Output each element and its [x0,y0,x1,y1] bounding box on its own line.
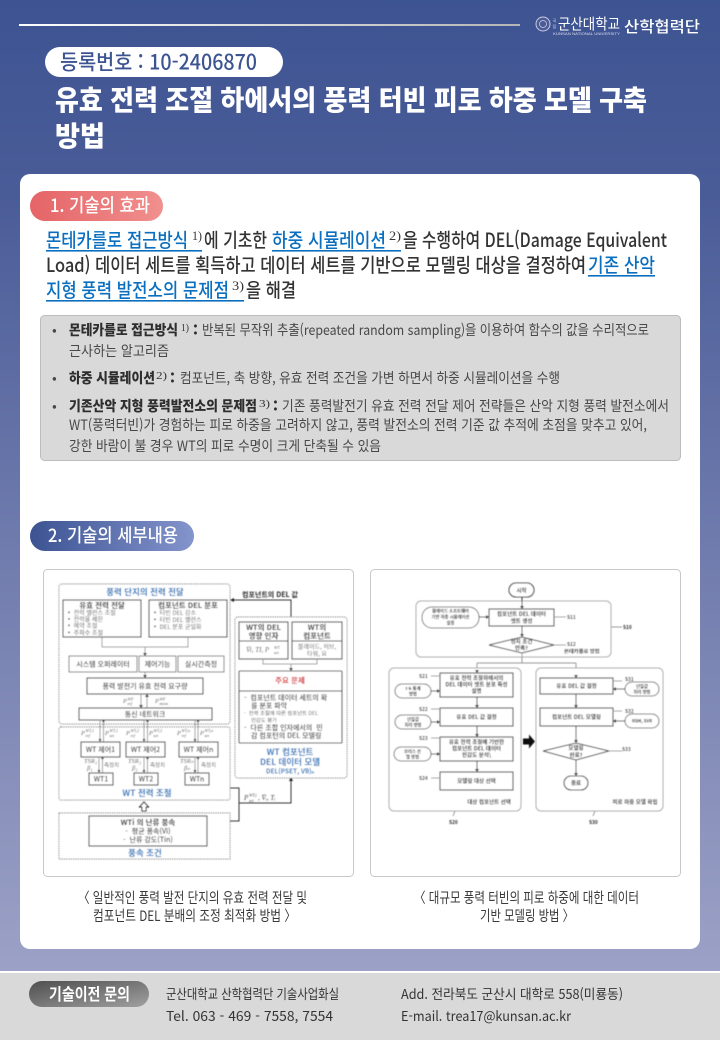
group: turbine power control: 측정치 [201,761,216,769]
group: S10 Monte Carlo [416,597,632,657]
group: turbine power control: WTn [190,774,204,784]
definition: Monte Carlo [52,320,649,361]
university logo: KUNSAN NATIONAL UNIVERSITY [553,31,620,36]
definition: load simulation: 2) [156,370,167,382]
definition: Monte Carlo: 1) [181,322,189,334]
group: WT component DEL data model: WT 컴포넌트 [267,746,314,758]
group: wind farm power delivery: ▪ 전력 밸런스 조절 [66,608,116,617]
group: S10 Monte Carlo: 기반 하중 시뮬레이션 [432,614,470,620]
group: S20 target component selection: 민감도 분석\ [462,751,492,759]
university logo: 군산대학교 [558,13,620,34]
group: turbine power control: WT 전력 조절 [122,787,172,799]
group: WT component DEL data model: DEL 데이터 모델 [260,756,320,768]
group: wind farm power delivery: 풍력 단지의 전력 전달 [106,586,184,598]
group: WT component DEL data model: 컴포넌트 [303,630,331,642]
group: S30 fatigue load model: 컴포넌트 DEL 모델링 [552,713,601,721]
group: turbine power control: β₂ [131,765,138,772]
group: S20 target component selection: 처리 방법 [404,722,422,728]
connector arrows with labels: set [249,798,254,803]
group: wind farm power delivery: 시스템 오퍼레이터 [76,660,130,670]
group: turbine power control: WT 제어1 [86,745,115,755]
title: 유효 전력 조절 하에서의 풍력 터빈 피로 하중 모델 구축 [55,79,647,119]
icon: black arrow [523,734,535,748]
group: WT component DEL data model: - 다른 조합 인자에서의 민 [244,723,323,733]
text block: effect summary: 몬테카를로 접근방식 [46,224,188,253]
group: turbine power control: set [110,733,115,738]
group: wind farm power delivery: WF [160,696,166,702]
contact: organisation and phone [166,983,339,1025]
group: S30 fatigue load model [536,668,663,826]
caption: left figure: 컴포넌트 DEL 분배의 조정 최적화 방법 〉 [93,905,296,926]
definition: existing problems: 기존 풍력발전기 유효 전력 전달 제어 전략들은 산악 지형 풍력 발전소에서 [282,396,669,416]
group: turbine power control: TSR₁ [84,758,97,765]
group: wind speed condition: - 평균 풍속(V̄i) [125,826,171,836]
panel: footer [0,973,720,1040]
connector arrows with labels: , V̄ᵢ, Tᵢ [258,794,275,802]
group: S30 fatigue load model: 모델링 [568,744,584,752]
group: S30 fatigue load model: S31 [625,676,634,683]
start node [509,583,534,597]
group: S30 fatigue load model: 완료? [570,751,583,759]
group: turbine power control: WT,2 [154,728,162,734]
text block: effect summary [46,224,667,303]
group: wind farm power delivery: P [154,698,159,705]
group: wind farm power delivery: 컴포넌트 DEL 분포 [158,600,218,611]
group: wind farm power delivery: ▪ 예약 조절 [66,621,97,630]
group: S30 fatigue load model: 처리 방법 [633,688,651,696]
text block: effect summary: 기존 산악 [588,249,655,278]
group: wind farm power delivery: ▪ 전력율 제한 [66,614,103,624]
group: S20 target component selection: S21 [419,673,428,680]
group: WT component DEL data model: 률 분포 파악 [251,701,288,711]
definition: existing problems: WT(풍력터빈)가 경험하는 피로 하중을 고려하지 않고, 풍력 발전소의 전력 기준 값 추적에 초점을 맞추고 있어, [69,415,647,435]
group: turbine power control: set [204,733,210,738]
group: wind farm power delivery: 풍력 발전기 유효 전력 요구량 [102,682,188,692]
group: S10 Monte Carlo: 만족? [515,644,528,652]
text block: effect summary: 3) [232,278,244,293]
definition: existing problems: 기존산악 지형 풍력발전소의 문제점 [69,396,257,416]
definition: Monte Carlo: 근사하는 알고리즘 [69,341,169,361]
group: WT component DEL data model: - 컴포넌트 데이터 세트의 확 [244,693,328,703]
text block: effect summary: 1) [192,228,202,243]
group: S20 target component selection: S23 [419,735,428,742]
group: WT component DEL data model: V̄i, TI, P [246,646,270,654]
group: wind farm power delivery: ▪ DEL 분포 균일화 [152,622,202,631]
definition: existing problems [52,396,669,456]
footer label pill: 기술이전 문의 [49,981,130,1005]
group: wind farm power delivery: 유효 전력 전달 [79,600,125,611]
contact: organisation and phone: Tel. 063 - 469 - 7558, 7554 [166,1005,334,1025]
panel: left figure frame [44,570,354,876]
group: S30 fatigue load model: S30 [589,819,598,826]
group: wind speed condition [59,813,230,859]
group: S10 Monte Carlo: S10 [623,624,632,631]
group: WT component DEL data model: 타워, 요 [307,649,327,658]
text block: effect summary: 을 해결 [246,274,296,303]
group: turbine power control: βₙ [183,765,190,772]
definition: Monte Carlo: : [193,320,198,340]
panel: main white card [20,174,700,949]
group: WT component DEL data model: WT의 DEL [246,622,282,633]
connector arrows with labels: P [243,794,249,802]
group: S20 target component selection: 유효 전력 조절하에서의 [450,674,503,682]
definition: load simulation [52,368,560,388]
text block: effect summary: 지형 풍력 발전소의 문제점 [46,274,229,303]
panel: definitions [40,316,680,460]
definition: Monte Carlo: • [52,320,57,340]
group: wind farm power delivery: ▪ 터빈 DEL 밸런스 [152,615,202,624]
group: S10 Monte Carlo: 컴포넌트 DEL 데이터 [497,610,546,618]
definition: existing problems: • [52,396,57,416]
group: S10 Monte Carlo: 몬테카를로 방법 [564,647,600,655]
group: turbine power control: 측정치 [104,761,119,769]
group: turbine power control [59,720,230,800]
group: turbine power control: WT,1 [86,728,94,734]
group: turbine power control: P [148,730,153,737]
caption: right figure [414,887,639,926]
group: S30 fatigue load model: RSM, SVR [632,718,652,724]
group: S20 target component selection: 모리스 선 [404,748,421,755]
icon: hollow up arrow [140,802,148,811]
chart: wind farm power delivery diagram [59,584,347,859]
group: wind farm power delivery: 실시간측정 [185,660,217,670]
contact: organisation and phone: 군산대학교 산학협력단 기술사업화실 [166,983,339,1003]
group: S20 target component selection: S22 [419,706,428,713]
group: WT component DEL data model [235,617,347,778]
heading: 2. technology details: 2. 기술의 세부내용 [48,522,178,548]
group: S20 target component selection: S20 [449,819,458,826]
group: WT component DEL data model: 감 컴포턴의 DEL 모델링 [251,731,321,741]
group: S10 Monte Carlo: 셋트 생성 [511,617,532,625]
university logo: 립 [552,23,556,29]
group: WT component DEL data model: - 전력 조절에 따른 컴포넌트 DEL [244,709,318,717]
group: S20 target component selection: S24 [419,775,428,782]
group: S20 target component selection: 단일값 [407,716,419,723]
group: wind farm power delivery: ▪ 터빈 DEL 감소 [152,608,197,617]
group: S20 target component selection [389,668,521,826]
text block: effect summary: 하중 시뮬레이션 [272,224,386,253]
text block: effect summary: 을 수행하여 DEL(Damage Equivalent [403,224,667,253]
group: wind farm power delivery: meas [160,701,168,706]
definition: existing problems: 3) [259,398,270,410]
group: turbine power control: WT2 [139,774,153,784]
definition: existing problems: 강한 바람이 불 경우 WT의 피로 수명이 크게 단축될 수 있음 [69,436,381,456]
group: turbine power control: β₁ [86,765,92,772]
definition: load simulation: • [52,368,57,388]
heading: 1. technology effect: 1. 기술의 효과 [50,192,150,218]
group: S10 Monte Carlo: 설정 [447,620,454,626]
group: wind farm power delivery: 제어기능 [145,660,171,670]
group: S10 Monte Carlo: S11 [567,614,576,621]
caption: right figure: 〈 대규모 풍력 터빈의 피로 하중에 대한 데이터 [414,887,639,908]
start node: 시작 [516,586,527,594]
title [55,79,647,155]
group: wind farm power delivery: ref [128,701,133,706]
group: WT component DEL data model: 주요 문제 [275,675,305,686]
caption: left figure [78,887,307,926]
definition: existing problems: : [273,396,278,416]
group: turbine power control: WT 제어n [184,745,213,755]
connector arrows with labels: 컴포넌트의 DEL 값 [242,590,299,600]
university logo [536,13,700,37]
definition: load simulation: : [170,368,175,388]
group: WT component DEL data model: 영향 인자 [249,630,278,642]
group: S20 target component selection: t-k 통계 [405,685,421,692]
group: turbine power control: WT,2 [130,728,139,734]
text block: effect summary: Load) 데이터 세트를 획득하고 데이터 세트를 기반으로 모델링 대상을 결정하여 [46,249,586,278]
registration number pill: 등록번호 : 10-2406870 [60,46,257,76]
caption: right figure: 기반 모델링 방법 〉 [480,905,574,926]
group: S30 fatigue load model: 단일값 [636,683,648,690]
flow connector [477,653,576,671]
group: turbine power control: WT1 [94,774,108,784]
group: S20 target component selection: 별 방법 [406,754,419,760]
group: S10 Monte Carlo: 블레이드 소프트웨어 [432,608,469,614]
group: wind farm power delivery [59,584,230,724]
group: S20 target component selection: DEL 데이터 셋트 분포 특성 [445,680,508,688]
group: WT component DEL data model: 블레이드, 허브, [298,642,336,651]
group: S30 fatigue load model: S33 [622,746,631,753]
group: wind farm power delivery: 통신 네트워크 [125,710,166,720]
group: wind farm power delivery: ▪ 주파수 조절 [66,628,103,637]
group: turbine power control: TSR₂ [128,758,142,765]
group: turbine power control: P [125,730,130,737]
group: turbine power control: P [176,730,181,737]
text block: effect summary: 에 기초한 [204,224,267,253]
group: turbine power control: P [199,730,204,737]
group: turbine power control: P [104,730,109,737]
definition: load simulation: 하중 시뮬레이션 [69,368,155,388]
group: turbine power control: P [80,730,85,737]
university logo: 산학협력단 [624,15,700,37]
group: S20 target component selection: 컴포넌트 DEL 데이터 [452,744,501,752]
definition: load simulation: 컴포넌트, 축 방향, 유효 전력 조건을 가변 하면서 하중 시뮬레이션을 수행 [180,368,560,388]
group: WT component DEL data model: 민감도 평가 [251,716,277,724]
group: wind farm power delivery: P [122,698,127,705]
connector arrows with labels: WT,i [249,792,258,798]
group: turbine power control: WT,n [204,728,213,734]
university logo: 국 [552,18,556,23]
group: S20 target component selection: 유효 DEL 값 결정 [456,713,497,721]
group: wind speed condition: WTi 의 난류 풍속 [121,817,175,828]
group: turbine power control: WT,1 [110,728,118,734]
panel: right figure frame [370,570,680,876]
group: S10 Monte Carlo: 정지 조건 [511,638,532,646]
group: turbine power control: WT,n [182,728,190,734]
group: S30 fatigue load model: 유효 DEL 값 결정 [556,682,597,690]
title: 방법 [55,115,105,155]
chart: modeling flowchart [389,583,663,826]
group: WT component DEL data model: set [274,650,279,655]
group: wind speed condition: 풍속 조건 [128,847,162,859]
group: S30 fatigue load model: 피로 하중 모델 확립 [612,798,658,806]
group: turbine power control: set [154,733,159,738]
group: wind farm power delivery: WF [128,696,134,702]
group: S20 target component selection: 대상 컴포넌트 선택 [467,798,511,806]
group: turbine power control: 측정치 [150,761,165,769]
caption: left figure: 〈 일반적인 풍력 발전 단지의 유효 전력 전달 및 [78,887,307,908]
group: turbine power control: ref [182,733,187,738]
contact: address and email [401,983,623,1025]
text block: effect summary: 2) [389,228,401,243]
connector arrows with labels [230,590,299,821]
group: S20 target component selection: 방법 [409,690,417,698]
group: S10 Monte Carlo: S12 [567,641,576,648]
group: turbine power control: ref [130,733,136,738]
group: turbine power control: WT 제어2 [131,745,160,755]
group: S30 fatigue load model: 종료 [571,779,581,787]
contact: address and email: Add. 전라북도 군산시 대학로 558(미룡동) [401,983,623,1003]
group: S20 target component selection: 모델링 대상 선택 [457,777,496,785]
group: turbine power control: TSRₙ [180,758,194,765]
group: turbine power control: ref [86,733,91,738]
header rule [19,24,520,26]
contact: address and email: E-mail. trea17@kunsan.ac.kr [401,1005,572,1025]
group: WT component DEL data model: WT의 [308,622,326,633]
group: WT component DEL data model: DEL(PSET, V̄θ)ₙ [266,766,315,776]
group: S30 fatigue load model: S32 [625,708,634,715]
group: WT component DEL data model: WT [274,645,280,650]
definition: Monte Carlo: 몬테카를로 접근방식 [69,320,178,340]
group: wind speed condition: - 난류 강도(Tin) [123,835,173,845]
group: S20 target component selection: 설명 [471,687,482,695]
definition: Monte Carlo: 반복된 무작위 추출(repeated random sampling)을 이용하여 함수의 값을 수리적으로 [202,320,649,340]
group: S20 target component selection: 유효 전력 조절에 기반한 [449,738,504,746]
